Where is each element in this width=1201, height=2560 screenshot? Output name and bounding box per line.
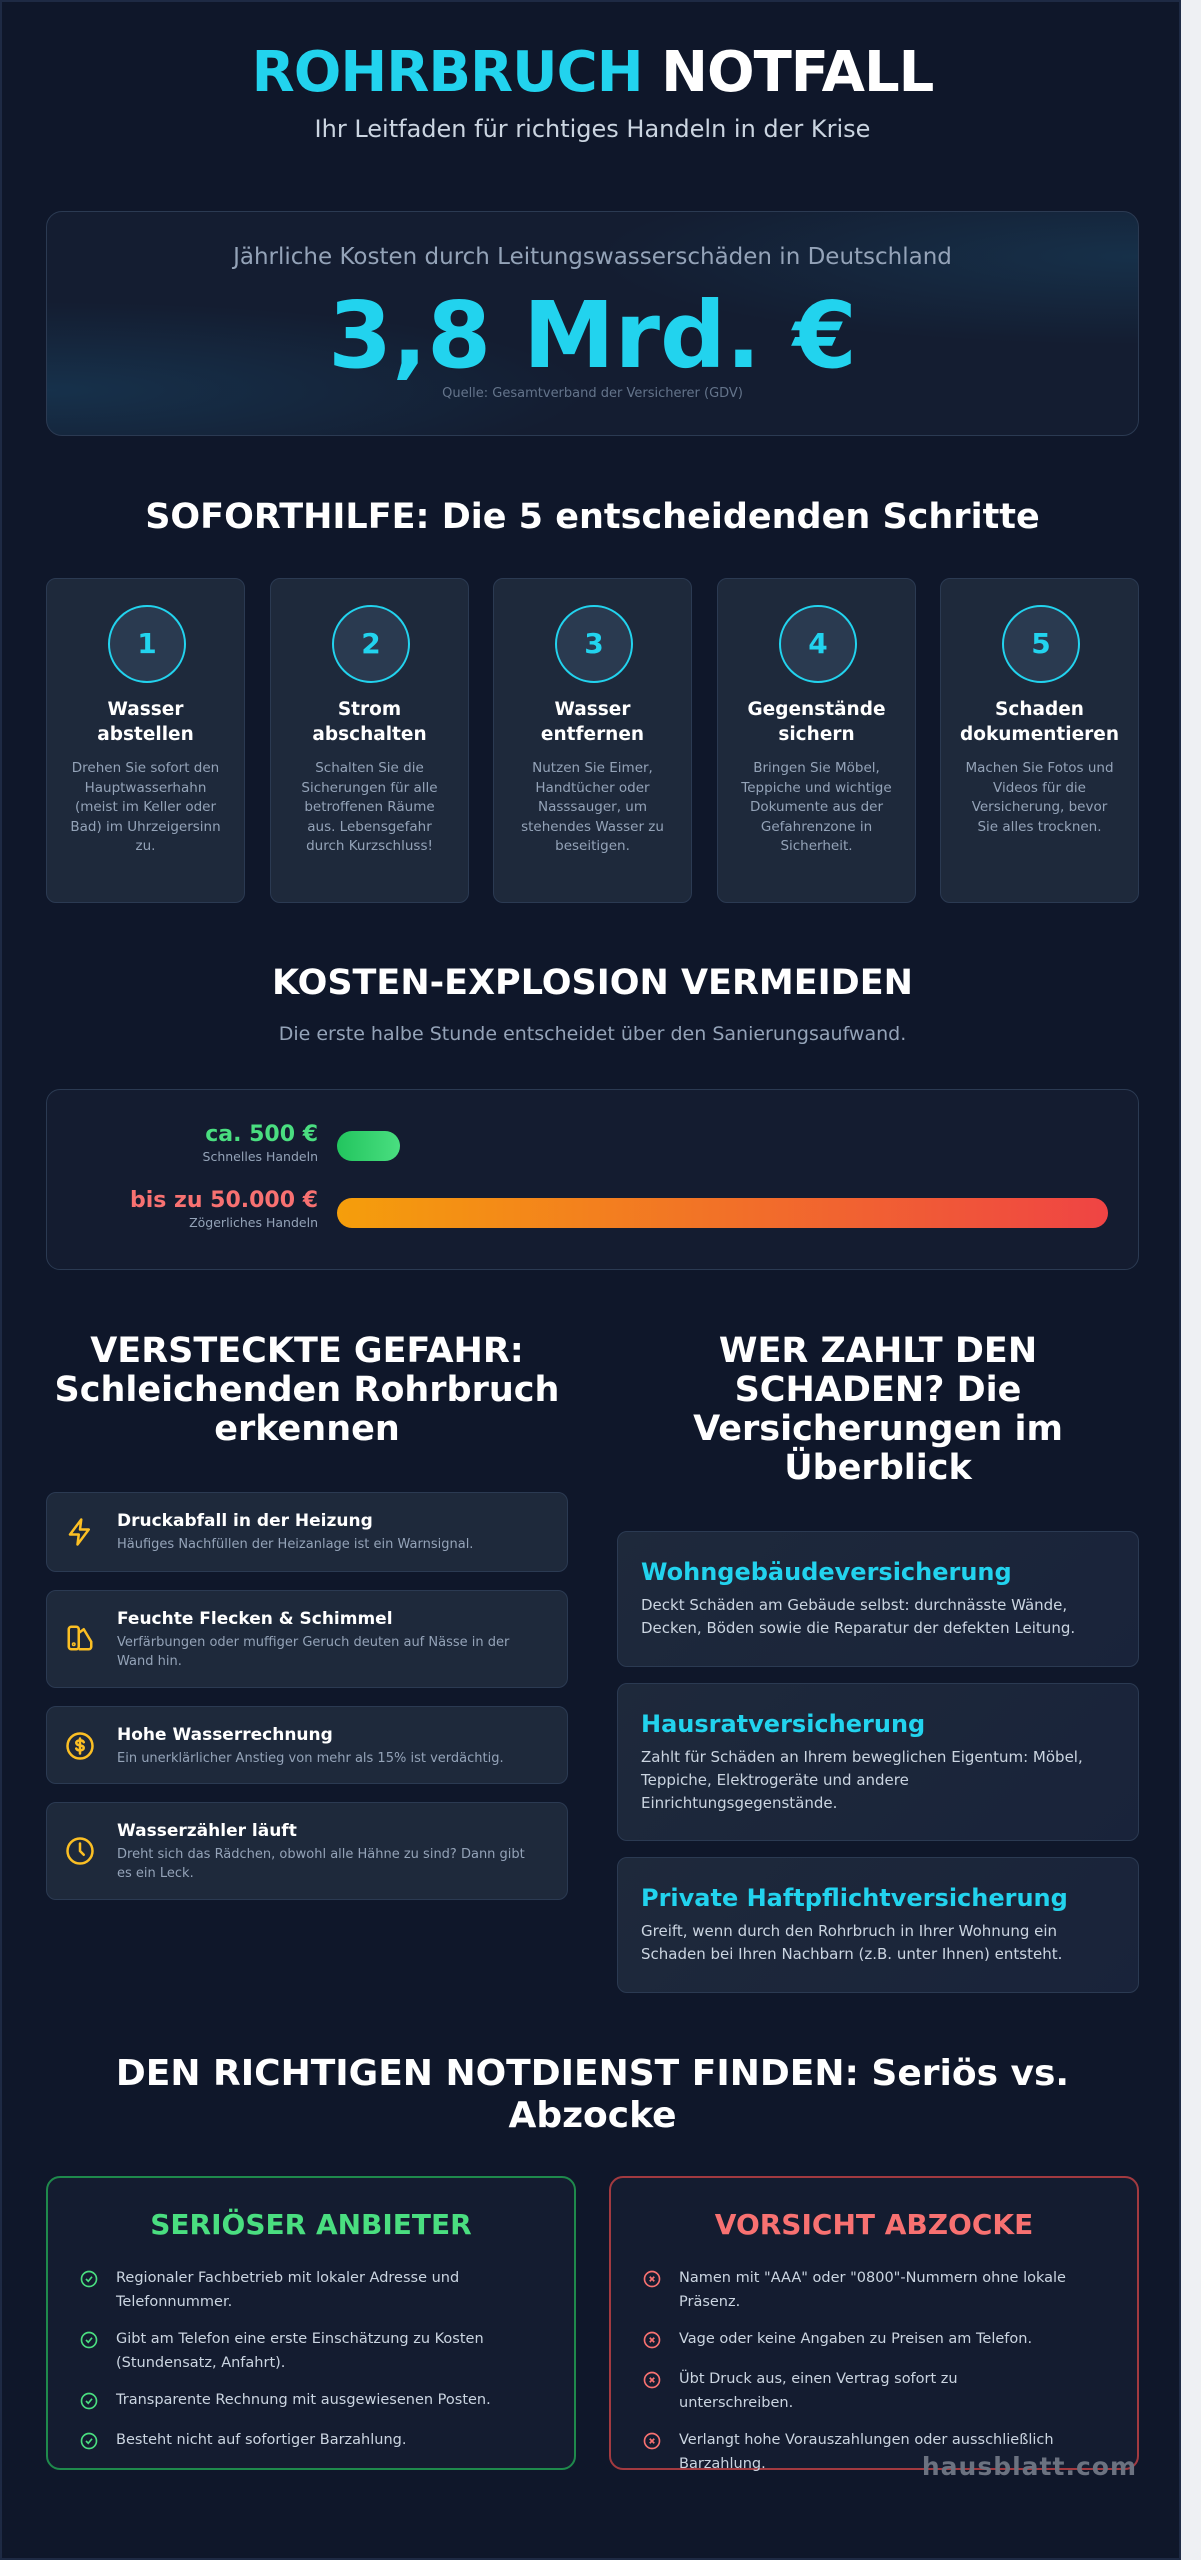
sign: wasserrechnung: Hohe Wasserrechnung — [117, 1725, 333, 1745]
sign: druckabfall: Häufiges Nachfüllen der Heizanlage ist ein Warnsignal. — [117, 1537, 473, 1552]
list serioes: Transparente Rechnung mit ausgewiesenen Posten. — [116, 2392, 491, 2408]
list serioes: Gibt am Telefon eine erste Einschätzung zu Kosten (Stundensatz, Anfahrt). — [116, 2331, 484, 2371]
list abzocke: Vage oder keine Angaben zu Preisen am Telefon. — [679, 2331, 1032, 2347]
sign: druckabfall — [46, 1492, 568, 1572]
insurance: wohngebaeude: Deckt Schäden am Gebäude selbst: durchnässte Wände, Decken, Böden sowie die Reparatur der defekten Leitung. — [641, 1596, 1075, 1637]
panel: serioes — [46, 2176, 576, 2470]
step 4 — [717, 578, 916, 903]
sign: flecken: Feuchte Flecken & Schimmel — [117, 1609, 393, 1629]
label fast: ca. 500 € — [205, 1122, 318, 1147]
list abzocke: Verlangt hohe Vorauszahlungen oder ausschließlich Barzahlung. — [679, 2432, 1054, 2472]
icon: stain — [68, 1626, 92, 1650]
sign: flecken — [46, 1590, 568, 1688]
cost comparison chart — [46, 1089, 1139, 1270]
kosten subtitle: Die erste halbe Stunde entscheidet über den Sanierungsaufwand. — [279, 1023, 906, 1045]
panel: abzocke — [609, 2176, 1139, 2470]
sign: wasserzaehler — [46, 1802, 568, 1900]
icon: clock — [66, 1837, 94, 1865]
heading: wer zahlt: WER ZAHLT DEN SCHADEN? Die Versicherungen im Überblick — [693, 1331, 1063, 1488]
stat number: 3,8 Mrd. € — [328, 282, 857, 389]
list serioes: Besteht nicht auf sofortiger Barzahlung. — [116, 2432, 406, 2448]
step 4: Bringen Sie Möbel, Teppiche und wichtige Dokumente aus der Gefahrenzone in Sicherheit. — [741, 760, 892, 854]
step 5: Machen Sie Fotos und Videos für die Versicherung, bevor Sie alles trocknen. — [965, 760, 1114, 834]
step 5 — [940, 578, 1139, 903]
label slow — [130, 1188, 318, 1230]
label slow: bis zu 50.000 € — [130, 1188, 318, 1213]
insurance: hausrat: Hausratversicherung — [641, 1710, 925, 1738]
insurance: haftpflicht: Greift, wenn durch den Rohrbruch in Ihrer Wohnung ein Schaden bei Ihren Nachbarn (z.B. unter Ihnen) entsteht. — [641, 1922, 1062, 1963]
heading: versteckte gefahr: VERSTECKTE GEFAHR: Schleichenden Rohrbruch erkennen — [55, 1331, 559, 1449]
step 1: abstellen — [97, 724, 194, 745]
step 3: 3 — [584, 627, 604, 660]
bar fast — [337, 1131, 400, 1161]
sign: wasserrechnung: Ein unerklärlicher Anstieg von mehr als 15% ist verdächtig. — [117, 1751, 504, 1766]
step 2: 2 — [361, 627, 381, 660]
insurance: hausrat: Zahlt für Schäden an Ihrem beweglichen Eigentum: Möbel, Teppiche, Elektrogeräte und andere Einrichtungsgegenstände. — [641, 1748, 1083, 1812]
step 2: Schalten Sie die Sicherungen für alle betroffenen Räume aus. Lebensgefahr durch Kurzschluss! — [301, 760, 438, 854]
step 4: 4 — [808, 627, 828, 660]
sign: wasserzaehler: Dreht sich das Rädchen, obwohl alle Hähne zu sind? Dann gibt es ein Leck. — [117, 1847, 525, 1881]
source: Quelle: Gesamtverband der Versicherer (GDV) — [442, 386, 743, 401]
step 5: Schaden — [995, 699, 1084, 720]
sign: wasserrechnung — [46, 1706, 568, 1784]
step 1 — [46, 578, 245, 903]
stat card — [46, 211, 1139, 436]
list abzocke — [644, 2270, 1066, 2472]
label slow: Zögerliches Handeln — [189, 1215, 318, 1230]
step 4: sichern — [778, 724, 855, 745]
heading: notdienst: DEN RICHTIGEN NOTDIENST FINDEN: Seriös vs. Abzocke — [116, 2053, 1069, 2136]
step 2 — [270, 578, 469, 903]
step 1: Wasser — [108, 699, 183, 720]
sign: druckabfall: Druckabfall in der Heizung — [117, 1511, 373, 1531]
insurance: wohngebaeude — [617, 1531, 1139, 1667]
step 1: Drehen Sie sofort den Hauptwasserhahn (meist im Keller oder Bad) im Uhrzeigersinn zu. — [70, 760, 221, 854]
step 1: 1 — [137, 627, 157, 660]
step 5: dokumentieren — [960, 724, 1119, 745]
list serioes — [80, 2270, 491, 2450]
stat label: Jährliche Kosten durch Leitungswasserschäden in Deutschland — [233, 244, 952, 270]
insurance: haftpflicht: Private Haftpflichtversicherung — [641, 1884, 1068, 1912]
watermark: hausblatt.com — [922, 2452, 1137, 2481]
title: ROHRBRUCH NOTFALL — [252, 40, 933, 105]
bar slow — [337, 1198, 1108, 1228]
step 5: 5 — [1031, 627, 1051, 660]
heading: kosten: KOSTEN-EXPLOSION VERMEIDEN — [272, 963, 913, 1003]
step 3: entfernen — [541, 724, 644, 745]
serioes title: SERIÖSER ANBIETER — [150, 2208, 472, 2241]
subtitle: Ihr Leitfaden für richtiges Handeln in der Krise — [315, 115, 870, 143]
list abzocke: Namen mit "AAA" oder "0800"-Nummern ohne lokale Präsenz. — [679, 2270, 1066, 2310]
insurance: haftpflicht — [617, 1857, 1139, 1993]
abzocke title: VORSICHT ABZOCKE — [715, 2208, 1033, 2241]
list serioes: Regionaler Fachbetrieb mit lokaler Adresse und Telefonnummer. — [116, 2270, 459, 2310]
label fast — [203, 1122, 318, 1164]
step 2: abschalten — [312, 724, 427, 745]
icon: lightning — [68, 1518, 90, 1546]
step 2: Strom — [338, 699, 401, 720]
icon: dollar — [66, 1732, 94, 1760]
list abzocke: Übt Druck aus, einen Vertrag sofort zu unterschreiben. — [679, 2371, 958, 2411]
step 3: Wasser — [555, 699, 630, 720]
heading: soforthilfe: SOFORTHILFE: Die 5 entscheidenden Schritte — [145, 497, 1040, 537]
step 4: Gegenstände — [748, 699, 886, 720]
step 3 — [493, 578, 692, 903]
label fast: Schnelles Handeln — [203, 1149, 318, 1164]
step 3: Nutzen Sie Eimer, Handtücher oder Nasssauger, um stehendes Wasser zu beseitigen. — [521, 760, 664, 854]
insurance: hausrat — [617, 1683, 1139, 1841]
insurance: wohngebaeude: Wohngebäudeversicherung — [641, 1558, 1012, 1586]
sign: wasserzaehler: Wasserzähler läuft — [117, 1821, 297, 1841]
sign: flecken: Verfärbungen oder muffiger Geruch deuten auf Nässe in der Wand hin. — [117, 1635, 509, 1669]
